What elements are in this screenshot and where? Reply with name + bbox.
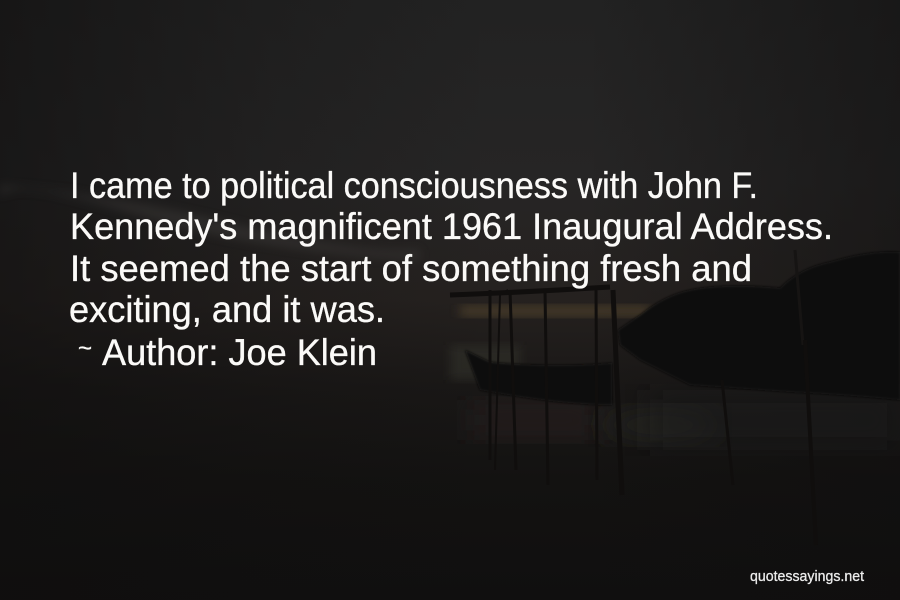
quote text: I came to political consciousness with John F. bbox=[70, 165, 758, 206]
website watermark: quotessayings.net bbox=[750, 568, 865, 585]
quote text: exciting, and it was. bbox=[69, 289, 385, 330]
quote text bbox=[69, 165, 833, 330]
background: tree line silhouette bbox=[618, 252, 900, 400]
quote text: Kennedy's magnificent 1961 Inaugural Address. bbox=[70, 206, 833, 247]
attribution: Author: Joe Klein bbox=[102, 332, 377, 373]
background: boat silhouette bbox=[465, 350, 612, 405]
background: jetty posts bbox=[450, 250, 816, 545]
quote text: It seemed the start of something fresh and bbox=[70, 248, 752, 289]
attribution: ~ bbox=[78, 335, 92, 362]
